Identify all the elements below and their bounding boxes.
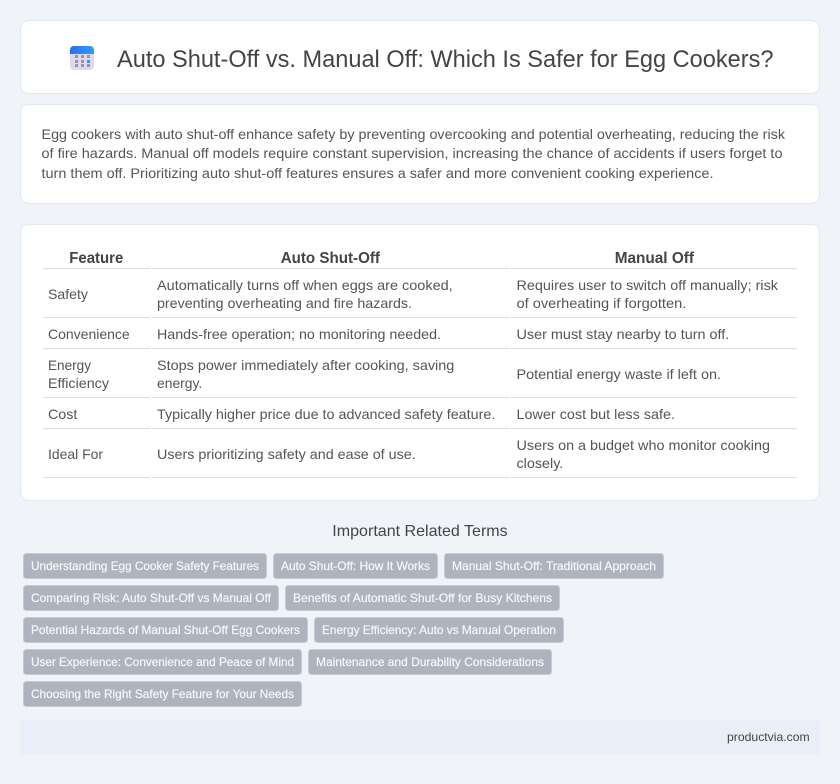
table row: safety: Automatically turns off when eggs are cooked,	[157, 277, 453, 293]
table row: energy efficiency: Potential energy waste if left on.	[516, 366, 721, 382]
table row: ideal for: Users prioritizing safety and ease of use.	[157, 446, 416, 462]
heading: important related terms: Important Related Terms	[332, 523, 508, 540]
table header row: Auto Shut-Off	[281, 250, 381, 267]
tag list: related terms: User Experience: Convenience and Peace of Mind	[31, 655, 294, 669]
table header row: Feature	[69, 250, 123, 267]
title: Auto Shut-Off vs. Manual Off: Which Is Safer for Egg Cookers?	[117, 46, 774, 73]
table row: energy efficiency	[48, 357, 721, 391]
table row: convenience: Hands-free operation; no monitoring needed.	[157, 326, 441, 342]
tag list: related terms	[24, 554, 664, 706]
table row: safety: Safety	[48, 286, 88, 302]
footer: productvia.com	[727, 730, 810, 744]
footer	[20, 720, 820, 754]
panel: title card	[20, 20, 820, 94]
table row: safety: Requires user to switch off manually; risk	[516, 277, 779, 293]
tag list: related terms: Energy Efficiency: Auto vs Manual Operation	[322, 623, 556, 637]
tag list: related terms: Maintenance and Durability Considerations	[316, 655, 544, 669]
table row: cost: Typically higher price due to advanced safety feature.	[157, 406, 495, 422]
tag list: related terms: Manual Shut-Off: Traditional Approach	[452, 559, 656, 573]
tag list: related terms: Understanding Egg Cooker Safety Features	[31, 559, 259, 573]
table row: ideal for: closely.	[516, 455, 563, 471]
table header row: Manual Off	[615, 250, 695, 267]
icon: calendar grid	[70, 46, 94, 70]
table header row	[69, 250, 695, 267]
table row: cost	[48, 406, 675, 422]
table row: energy efficiency: Stops power immediately after cooking, saving	[157, 357, 454, 373]
panel: comparison table	[20, 224, 820, 500]
tag list: related terms: Benefits of Automatic Shut-Off for Busy Kitchens	[293, 591, 552, 605]
table row: energy efficiency: Energy	[48, 357, 91, 373]
panel: intro paragraph: Egg cookers with auto shut-off enhance safety by preventing overcooking and potential overheating, reducing the risk	[42, 126, 786, 142]
panel: intro paragraph	[20, 104, 820, 204]
tag list: related terms: Auto Shut-Off: How It Works	[281, 559, 430, 573]
panel: intro paragraph: turn them off. Prioritizing auto shut-off features ensures a safer and more convenient cooking experience.	[42, 165, 714, 181]
table row: ideal for: Users on a budget who monitor cooking	[516, 437, 770, 453]
tag list: related terms: Comparing Risk: Auto Shut-Off vs Manual Off	[31, 591, 272, 605]
table row: cost: Cost	[48, 406, 77, 422]
table row: energy efficiency: Efficiency	[48, 375, 109, 391]
table row: convenience	[48, 326, 729, 342]
table row: convenience: User must stay nearby to turn off.	[516, 326, 729, 342]
panel: intro paragraph: of fire hazards. Manual off models require constant supervision, increasing the chance of accidents if users forget to	[42, 145, 783, 161]
table row: convenience: Convenience	[48, 326, 130, 342]
table row: safety	[48, 277, 779, 311]
table row: safety: preventing overheating and fire hazards.	[157, 295, 412, 311]
table row: safety: of overheating if forgotten.	[516, 295, 686, 311]
tag list: related terms: Potential Hazards of Manual Shut-Off Egg Cookers	[31, 623, 300, 637]
table row: ideal for	[48, 437, 770, 471]
table row: energy efficiency: energy.	[157, 375, 202, 391]
table row: ideal for: Ideal For	[48, 446, 103, 462]
table row: cost: Lower cost but less safe.	[516, 406, 675, 422]
tag list: related terms: Choosing the Right Safety Feature for Your Needs	[31, 687, 294, 701]
